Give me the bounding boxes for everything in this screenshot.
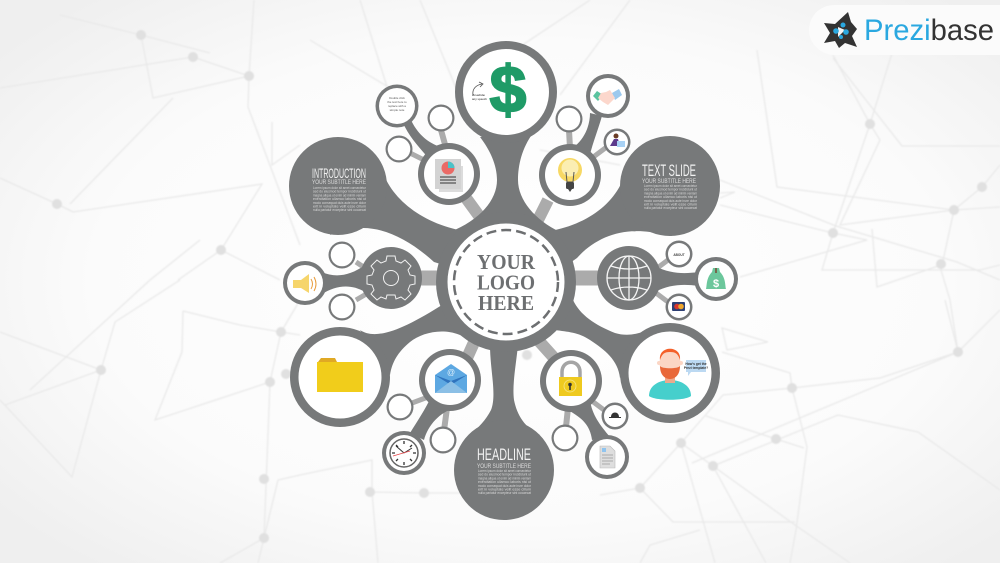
panel: folder circle — [290, 327, 390, 427]
center logo circle — [436, 212, 576, 352]
logo placeholder text: LOGO — [477, 270, 535, 294]
empty circle: mail bottom — [430, 426, 456, 454]
empty circle: upper left one — [428, 104, 454, 132]
note text: double — [472, 93, 486, 97]
body text: modo consequat duis aute irure dolor — [313, 201, 367, 205]
light connector stems — [356, 130, 668, 438]
panel: document circle — [585, 435, 629, 479]
speech bubble: Prezi template? — [684, 366, 708, 370]
subtitle: YOUR SUBTITLE HERE — [312, 180, 366, 186]
panel: small person circle — [604, 128, 630, 156]
icon: padlock — [559, 362, 582, 396]
body text: sed do eiusmod tempor incididunt ut — [313, 190, 366, 194]
mind map diagram — [283, 41, 738, 520]
twig: globe to bag — [655, 266, 698, 292]
icon: globe outline — [607, 256, 651, 300]
panel: text slide — [620, 136, 720, 236]
body text: modo consequat duis aute irure dolor — [644, 199, 698, 203]
twig: gear to speaker — [322, 265, 365, 294]
body text: nulla pariatur excepteur sint occaecat — [478, 491, 531, 495]
body text: magna aliqua ut enim ad minim veniam — [313, 193, 366, 197]
icon: hat — [609, 412, 621, 418]
panel: clock circle — [382, 431, 426, 475]
empty circle: upper left two — [386, 136, 412, 162]
speech bubble: How's get the — [685, 362, 707, 366]
icon: red-haired man — [649, 349, 691, 400]
panel: mail circle — [419, 349, 481, 411]
note text — [472, 93, 487, 101]
branch: folder — [360, 303, 475, 375]
logo placeholder text — [477, 250, 536, 315]
panel: credit card circle — [666, 294, 692, 320]
panel: small hat circle — [602, 402, 628, 430]
body text: erit in voluptate velit esse cillum — [478, 488, 531, 492]
icon: money bag: $ — [713, 278, 719, 290]
icon: handshake — [593, 89, 622, 105]
icon: envelope: @ — [447, 368, 455, 377]
panel: speaker circle — [283, 261, 327, 305]
branch: introduction — [330, 162, 470, 270]
logo wordmark: Prezibase — [864, 14, 994, 47]
dark tree branches — [322, 113, 698, 440]
heading: introduction: INTRODUCTION — [312, 165, 366, 181]
body text: Lorem ipsum dolor sit amet consectetur — [644, 184, 698, 188]
branch: dollar — [450, 133, 560, 232]
icon: person with laptop — [610, 134, 625, 147]
body text: exercitation ullamco laboris nisi ut — [644, 195, 697, 199]
body text: Lorem ipsum dolor sit amet consectetur — [478, 469, 532, 473]
dashed ring — [454, 230, 558, 334]
panel: bulb circle — [539, 144, 601, 206]
panel: note circle — [376, 84, 418, 128]
empty circle: gear bottom — [328, 294, 356, 320]
body text: erit in voluptate velit esse cillum — [644, 202, 697, 206]
note text: any speech — [472, 97, 487, 101]
body text: modo consequat duis aute irure dolor — [478, 484, 532, 488]
body text — [478, 469, 532, 495]
body text — [644, 184, 698, 210]
body text: magna aliqua ut enim ad minim veniam — [478, 476, 531, 480]
body text: erit in voluptate velit esse cillum — [313, 204, 366, 208]
branch: text slide — [545, 162, 672, 270]
panel: lock circle — [540, 350, 602, 412]
icon: credit card — [672, 302, 685, 311]
note text: the text here to — [387, 100, 407, 104]
icon: curved arrow — [473, 82, 483, 95]
speech bubble — [684, 360, 708, 376]
panel: dollar circle — [455, 41, 557, 143]
panel: money bag circle — [694, 257, 738, 301]
icon: yellow folder — [317, 358, 363, 392]
twig: bulb to handshake — [575, 113, 602, 155]
icon: light bulb — [558, 158, 582, 192]
icon: document — [600, 446, 615, 468]
subtitle: YOUR SUBTITLE HERE — [477, 464, 531, 470]
note text: simple note — [390, 108, 405, 112]
empty circle: mail left — [386, 394, 414, 420]
icon: Prezibase star — [824, 12, 857, 48]
panel: small label circle — [666, 240, 692, 268]
empty circle: gear top — [328, 242, 356, 268]
body text: magna aliqua ut enim ad minim veniam — [644, 191, 697, 195]
branch: headline — [470, 345, 540, 435]
panel: globe circle — [597, 246, 661, 310]
branch: person — [555, 300, 645, 378]
heading: headline: HEADLINE — [477, 445, 531, 464]
body text: nulla pariatur excepteur sint occaecat — [644, 206, 697, 210]
icon: report with pie chart — [435, 159, 463, 192]
logo placeholder text: HERE — [478, 291, 534, 315]
heading: text slide: TEXT SLIDE — [642, 161, 696, 180]
panel: chart circle — [418, 143, 480, 205]
empty circle: lock bottom — [552, 424, 578, 452]
panel: person circle — [620, 323, 720, 423]
panel: introduction — [289, 137, 387, 235]
small label text: ABOUT — [673, 253, 685, 257]
body text: sed do eiusmod tempor incididunt ut — [478, 473, 531, 477]
logo: Prezibase badge — [809, 5, 1000, 55]
body text: nulla pariatur excepteur sint occaecat — [313, 208, 366, 212]
icon: speaker — [293, 274, 316, 293]
icon: dollar sign: $ — [490, 52, 526, 126]
icon: gear outline — [367, 256, 415, 300]
body text: exercitation ullamco laboris nisi ut — [313, 197, 366, 201]
note text: Double click — [389, 96, 405, 100]
twig: chart to note — [404, 120, 445, 160]
panel: headline — [454, 420, 554, 520]
twig: mail to clock — [410, 395, 455, 440]
body text: sed do eiusmod tempor incididunt ut — [644, 188, 697, 192]
body text — [313, 186, 367, 212]
body text: exercitation ullamco laboris nisi ut — [478, 480, 531, 484]
twig: lock to document — [568, 400, 610, 440]
panel: handshake circle — [586, 74, 630, 118]
note text: replace with a — [388, 104, 406, 108]
subtitle: YOUR SUBTITLE HERE — [642, 179, 696, 185]
panel: gear circle — [360, 247, 422, 309]
empty circle: upper right — [556, 106, 582, 132]
icon: wall clock — [390, 439, 418, 467]
body text: Lorem ipsum dolor sit amet consectetur — [313, 186, 367, 190]
logo placeholder text: YOUR — [477, 250, 536, 274]
